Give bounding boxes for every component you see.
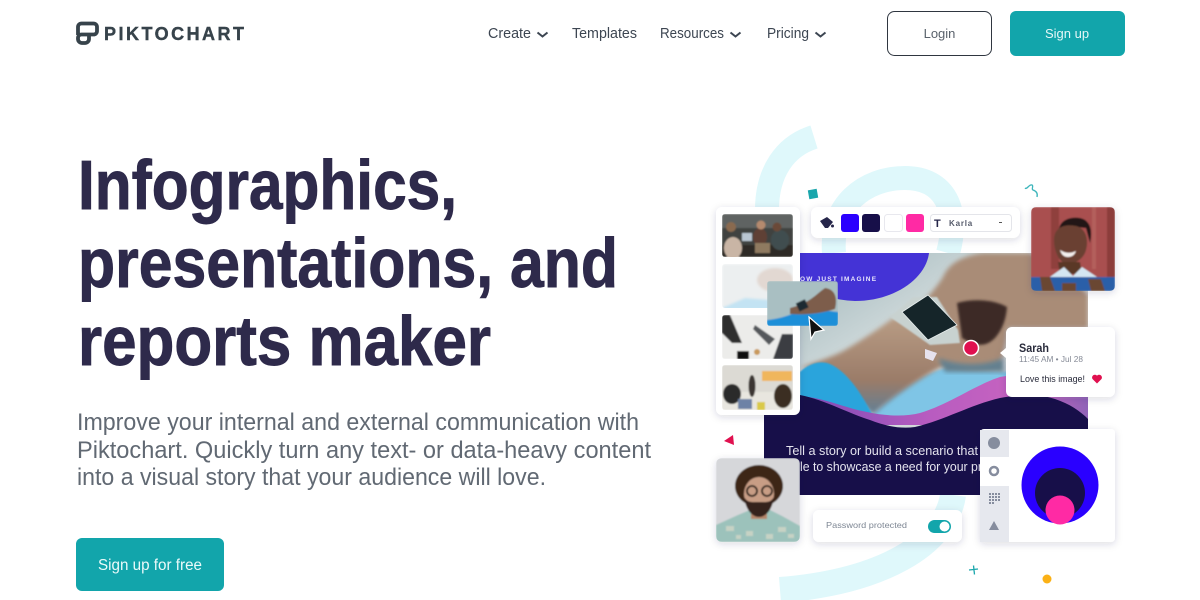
man portrait xyxy=(716,458,800,542)
card body text: Tell a story or build a scenario that xyxy=(786,444,979,458)
call to action button: Sign up for free xyxy=(98,557,202,574)
navy card background xyxy=(764,395,1088,495)
comment marker dot xyxy=(964,340,978,356)
yellow dot xyxy=(1042,574,1052,584)
main design card xyxy=(764,253,1088,495)
card body text xyxy=(786,444,982,474)
comment card: Love this image! xyxy=(1020,374,1085,384)
navigation menu: Create xyxy=(488,26,531,42)
icon: heart xyxy=(1092,375,1102,384)
sleeve xyxy=(800,361,872,413)
purple blob xyxy=(790,253,929,301)
watch band xyxy=(890,297,960,345)
description paragraph: Improve your internal and external communication with xyxy=(77,409,639,436)
paint bucket icon xyxy=(820,217,833,228)
woman portrait xyxy=(1031,207,1115,291)
hand xyxy=(925,253,1088,369)
login button xyxy=(888,12,992,56)
thumbnail nail xyxy=(925,349,937,361)
card small heading: OW JUST IMAGINE xyxy=(800,276,877,283)
decorative shapes xyxy=(724,185,1052,583)
navy wave xyxy=(764,395,1088,495)
description paragraph: Piktochart. Quickly turn any text- or data-heavy content xyxy=(77,437,651,464)
navigation menu xyxy=(488,26,826,42)
comment card: 11:45 AM • Jul 28 xyxy=(1019,355,1084,364)
thumb shadow xyxy=(938,358,1004,372)
password protected card: Password protected xyxy=(826,520,907,530)
call to action button xyxy=(76,538,224,591)
pale blue lower area xyxy=(874,368,1006,416)
colour swatches xyxy=(841,214,924,232)
red triangle xyxy=(724,435,734,445)
headline xyxy=(78,146,618,380)
thumbnail panel xyxy=(716,207,800,415)
background spiral arcs xyxy=(767,137,953,590)
thumbnail: team meeting xyxy=(722,214,793,259)
floating photo thumbnail xyxy=(767,281,838,326)
font selector: Karla xyxy=(949,219,973,228)
navigation menu: Pricing xyxy=(767,26,809,42)
forearm xyxy=(800,318,958,415)
headline: Infographics, xyxy=(78,146,457,224)
chart sidebar xyxy=(980,430,1009,542)
navigation menu: Resources xyxy=(660,26,724,42)
logo: PIKTOCHART xyxy=(104,24,244,44)
watch photo xyxy=(790,253,1088,433)
teal cross xyxy=(969,566,978,574)
curly hair xyxy=(735,465,783,507)
navigation menu: Templates xyxy=(572,26,637,42)
sign up button xyxy=(1010,11,1125,56)
font selector: T xyxy=(934,218,941,230)
description paragraph: into a visual story that your audience will love. xyxy=(77,464,546,491)
palm shadow xyxy=(957,300,1007,345)
purple wave xyxy=(800,370,1088,425)
font selector xyxy=(930,214,1012,232)
teal squiggle xyxy=(1025,185,1037,197)
thumbnail: desk from above xyxy=(722,315,793,359)
comment card xyxy=(1000,327,1115,397)
toggle xyxy=(928,520,951,533)
thumbnail: whiteboard session xyxy=(722,365,793,410)
card body text: le to showcase a need for your pr xyxy=(800,460,982,474)
login button: Login xyxy=(924,26,955,41)
comment card: Sarah xyxy=(1019,341,1049,355)
thumbnail: faded watch photo xyxy=(722,264,793,310)
description paragraph xyxy=(77,409,651,491)
sign up button: Sign up xyxy=(1045,26,1089,41)
headline: reports maker xyxy=(78,302,491,380)
headline: presentations, and xyxy=(78,224,618,302)
chart panel xyxy=(980,429,1115,542)
password protected card xyxy=(813,510,962,542)
nested circle chart xyxy=(1022,446,1098,524)
beard xyxy=(744,497,774,517)
teal square xyxy=(808,189,818,199)
cursor arrow xyxy=(809,317,824,339)
watch screen xyxy=(902,295,957,340)
toolbar xyxy=(811,207,1020,238)
